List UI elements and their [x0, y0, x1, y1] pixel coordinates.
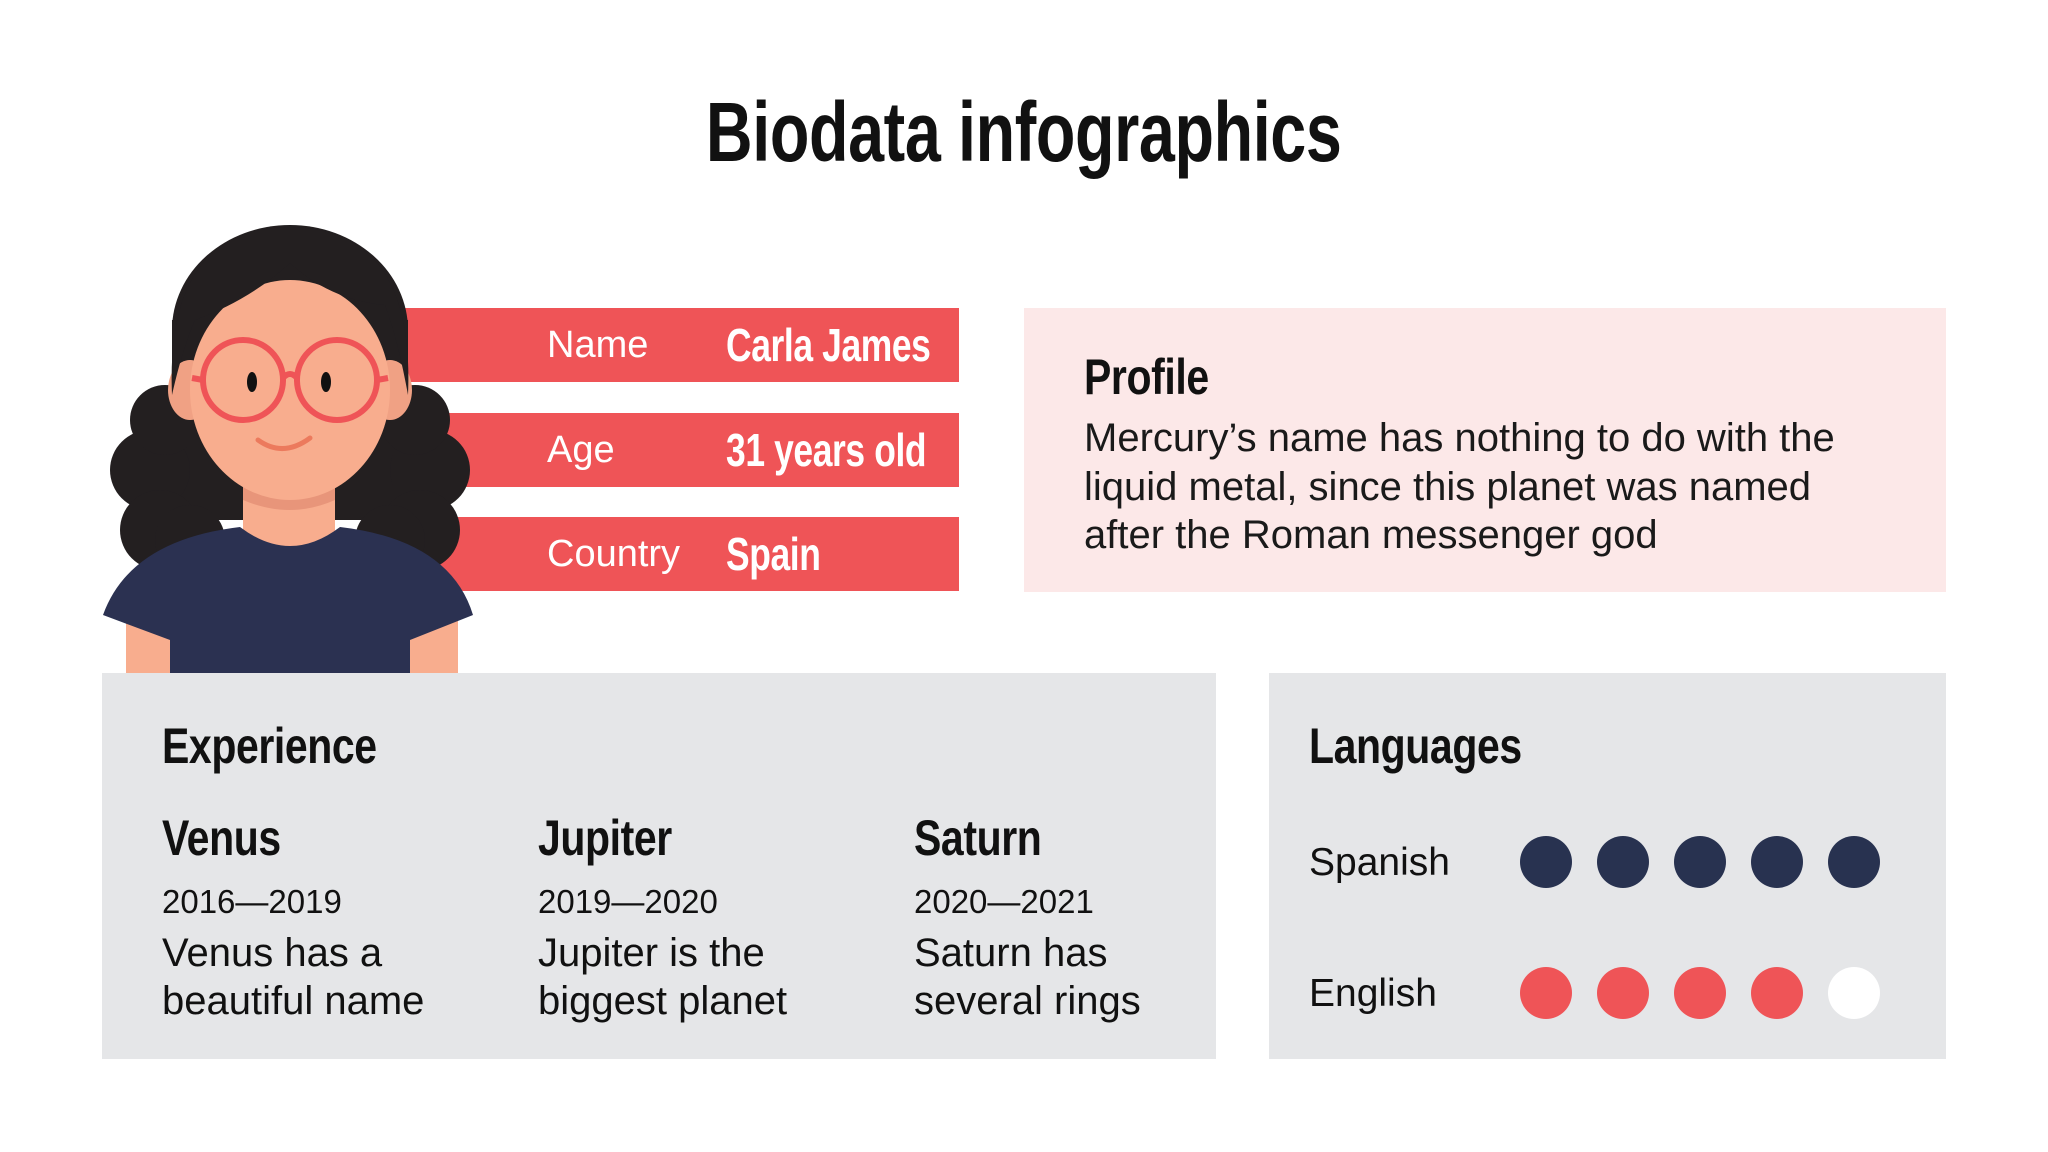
face [190, 280, 390, 500]
arms [126, 610, 458, 675]
column: jupiter [538, 810, 787, 1023]
column: jupiter: Jupiter is the [538, 931, 765, 975]
column: venus: Venus [162, 810, 281, 866]
panel: profile [1024, 308, 1946, 592]
panel: languages [1269, 673, 1946, 1059]
column: venus: 2016—2019 [162, 883, 342, 920]
column: saturn: Saturn has [914, 931, 1107, 975]
column: saturn: 2020—2021 [914, 883, 1094, 920]
column: saturn: Saturn [914, 810, 1041, 866]
row: spanish [1309, 836, 1880, 888]
row: english: English [1309, 972, 1437, 1015]
heading: languages: Languages [1309, 718, 1522, 774]
title: Biodata infographics [706, 85, 1342, 179]
profile text: Mercury’s name has nothing to do with the [1084, 416, 1835, 460]
column: venus [162, 810, 424, 1023]
bar: name: Name [547, 324, 648, 366]
bar: name [380, 308, 959, 382]
bar: name: Carla James [726, 319, 931, 371]
profile text: after the Roman messenger god [1084, 513, 1658, 557]
row: spanish: Spanish [1309, 841, 1450, 884]
heading: profile: Profile [1084, 349, 1209, 405]
column: jupiter: Jupiter [538, 810, 672, 866]
bar: country: Country [547, 533, 680, 575]
smile [258, 438, 310, 449]
panel: experience [102, 673, 1216, 1059]
profile text: liquid metal, since this planet was named [1084, 464, 1811, 508]
bar: age: Age [547, 429, 615, 471]
eyes [247, 372, 257, 392]
column: jupiter: 2019—2020 [538, 883, 718, 920]
column: jupiter: biggest planet [538, 979, 787, 1023]
bar: country: Spain [726, 528, 821, 580]
bar: country [380, 517, 959, 591]
shirt [103, 527, 473, 675]
neck [243, 440, 335, 550]
row: english [1309, 967, 1880, 1019]
bar: age: 31 years old [726, 424, 926, 476]
bar: age [380, 413, 959, 487]
column: saturn: several rings [914, 979, 1141, 1023]
column: venus: beautiful name [162, 979, 424, 1023]
glasses [192, 340, 388, 420]
profile text [1084, 416, 1835, 557]
top hair with part [172, 227, 408, 395]
ears [168, 360, 212, 420]
character illustration [103, 225, 473, 673]
column: saturn [914, 810, 1141, 1023]
heading: experience: Experience [162, 718, 377, 774]
column: venus: Venus has a [162, 931, 382, 975]
back curly hair [110, 225, 470, 575]
